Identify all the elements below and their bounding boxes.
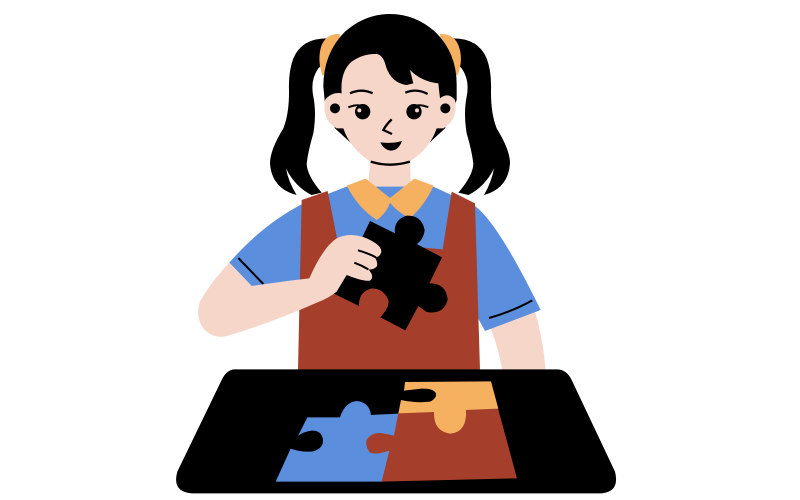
neck top: [370, 163, 411, 178]
eyebrows: [350, 91, 428, 94]
red puzzle piece: [366, 408, 517, 482]
orange hair ties: [319, 34, 461, 76]
neck: [368, 163, 411, 200]
ear studs: [330, 103, 340, 113]
back hair: [323, 14, 457, 148]
orange puzzle piece: [398, 381, 498, 434]
blue shirt: [229, 187, 541, 331]
right forearm: [490, 312, 546, 373]
arm and hand: [198, 235, 381, 337]
orange collar: [347, 179, 434, 220]
finger lines: [354, 250, 376, 269]
eyelashes: [348, 105, 428, 107]
mouth: [380, 141, 402, 151]
left pigtail: [270, 38, 327, 195]
table and puzzle: [176, 369, 616, 493]
blue puzzle piece: [276, 401, 403, 482]
held black puzzle piece: [333, 216, 448, 330]
black table: [176, 369, 616, 493]
sleeve cuff lines: [238, 258, 532, 318]
girl's upper body: [198, 163, 546, 373]
face: [324, 54, 456, 164]
chin line: [371, 162, 410, 165]
nose: [383, 119, 392, 134]
right eye: [406, 104, 422, 119]
head: [270, 14, 510, 195]
left eye: [355, 104, 370, 119]
right pigtail: [453, 38, 510, 195]
red apron: [298, 191, 480, 370]
